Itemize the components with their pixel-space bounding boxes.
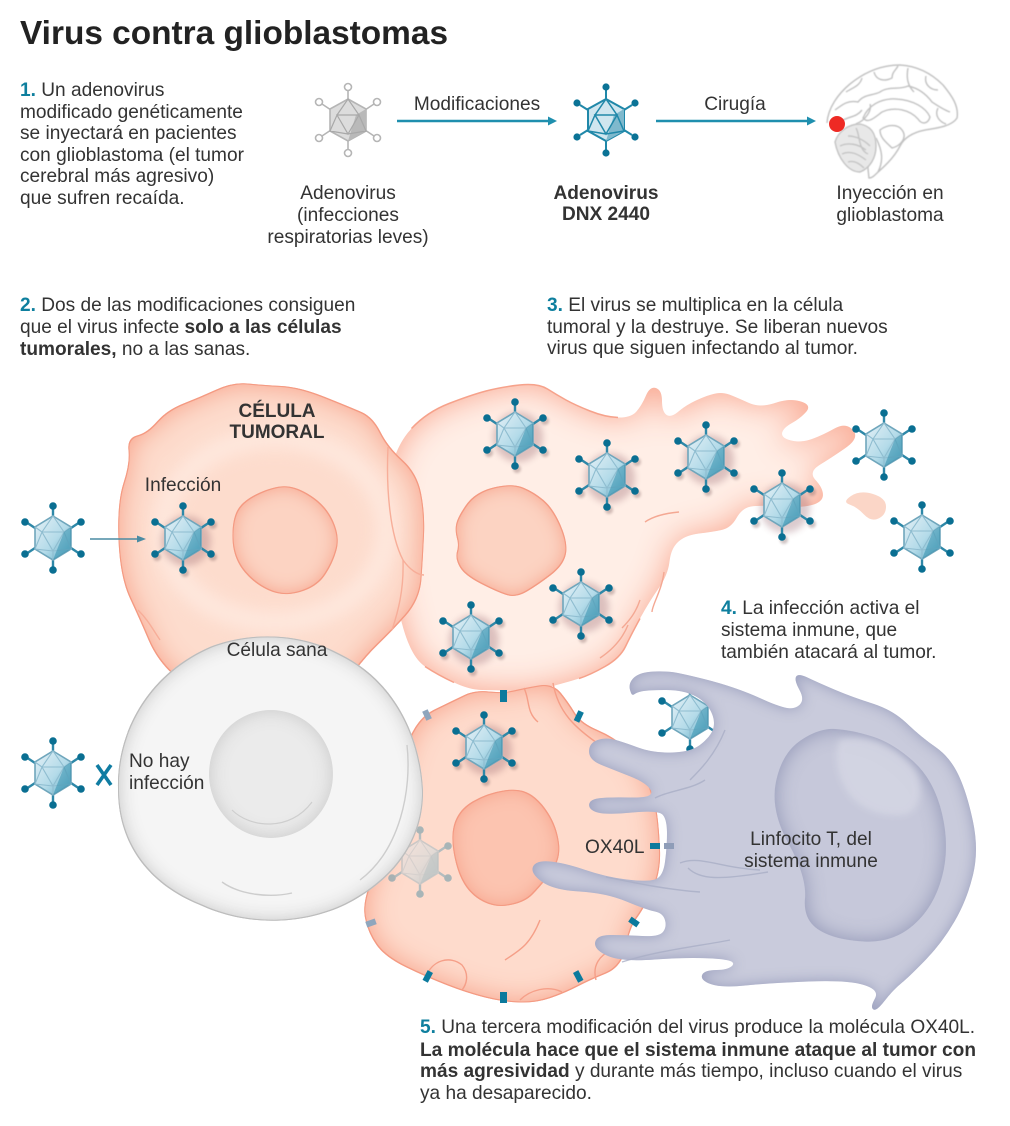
fragment <box>846 492 886 520</box>
text block: step 4: sistema inmune, que <box>721 620 897 641</box>
virus group: multiplied in tumour cell <box>439 398 954 676</box>
text block: step 4: también atacará al tumor. <box>721 642 936 663</box>
label: célula tumoral: TUMORAL <box>230 422 325 443</box>
text block: step 4: 4. La infección activa el <box>721 598 920 619</box>
label: no hay infección: No hay <box>129 751 190 772</box>
virus: outside tumour <box>21 502 85 574</box>
icon: adenovirus (grey) <box>316 84 380 156</box>
label: OX40L: OX40L <box>585 837 644 858</box>
label: adenovirus: respiratorias leves) <box>267 227 429 248</box>
text block: step 1: cerebral más agresivo) <box>20 166 214 187</box>
nucleus <box>209 710 333 838</box>
virus: blocked <box>21 737 85 809</box>
text block: step 3: tumoral y la destruye. Se liberan nuevos <box>547 317 888 338</box>
label: célula sana: Célula sana <box>227 640 328 661</box>
panel: destroyed tumour cell with viruses <box>388 384 886 691</box>
label: injection in glioblastoma: Inyección en <box>836 183 944 204</box>
panel: healthy cell <box>118 636 423 921</box>
text block: step 2: 2. Dos de las modificaciones consiguen <box>20 295 355 316</box>
label: modificaciones: Modificaciones <box>414 94 540 115</box>
label: adenovirus: (infecciones <box>297 205 399 226</box>
text block: step 5: más agresividad y durante más tiempo, incluso cuando el virus <box>420 1061 962 1082</box>
label: linfocito T: sistema inmune <box>744 851 878 872</box>
virus: in bottom tumour cell <box>452 711 518 786</box>
panel: T lymphocyte <box>532 671 976 1010</box>
arrow: entry into tumour cell <box>90 536 146 542</box>
label: adenovirus DNX 2440: DNX 2440 <box>562 204 650 225</box>
text block: step 3: 3. El virus se multiplica en la célula <box>547 295 843 316</box>
label: adenovirus DNX 2440: Adenovirus <box>553 183 659 204</box>
icon: adenovirus DNX 2440 <box>573 83 639 157</box>
text block: step 4 <box>721 598 936 663</box>
text block: step 1: que sufren recaída. <box>20 188 185 209</box>
text block: step 2: tumorales, no a las sanas. <box>20 339 250 360</box>
icon: brain with tumour <box>827 65 957 178</box>
text block: step 3: virus que siguen infectando al tumor. <box>547 338 858 359</box>
label: injection in glioblastoma <box>836 183 944 226</box>
text block: step 5: La molécula hace que el sistema inmune ataque al tumor con <box>420 1040 976 1061</box>
text block: step 1: modificado genéticamente <box>20 102 243 123</box>
label: adenovirus <box>267 183 429 248</box>
label: linfocito T: Linfocito T, del <box>750 829 872 850</box>
molecule: OX40L <box>650 843 674 849</box>
text block: step 5: ya ha desaparecido. <box>420 1083 592 1104</box>
tumour dot <box>829 116 845 132</box>
cerebellum <box>835 124 876 172</box>
label: no hay infección <box>129 751 204 794</box>
arrow: cirugía <box>656 116 816 126</box>
nucleus of bottom cell <box>452 790 559 906</box>
virus: fading behind healthy cell <box>388 826 452 898</box>
icon: X <box>97 765 111 785</box>
label: infección: Infección <box>145 475 221 496</box>
title: Virus contra glioblastomas <box>20 15 448 52</box>
nucleus lobe highlight <box>836 738 920 815</box>
nucleus crease <box>232 802 312 824</box>
text block: step 2 <box>20 295 355 360</box>
label: no hay infección: infección <box>129 773 204 794</box>
panel: tumour cell bottom <box>364 683 660 1003</box>
label: célula tumoral <box>230 400 325 443</box>
OX40L markers on tumour <box>365 690 640 1003</box>
label: linfocito T <box>744 829 878 872</box>
virus: captured by T cell <box>658 681 722 753</box>
label: injection in glioblastoma: glioblastoma <box>836 205 944 226</box>
text block: step 5 <box>420 1017 976 1104</box>
label: célula tumoral: CÉLULA <box>238 400 316 422</box>
text block: step 3 <box>547 295 888 359</box>
label: cirugía: Cirugía <box>704 94 766 115</box>
arrow: modificaciones <box>397 116 557 126</box>
virus: infecting tumour cell <box>151 502 217 577</box>
T cell nucleus <box>775 729 946 942</box>
panel: tumour cell (infection) <box>118 383 424 690</box>
T cell folds <box>606 730 768 962</box>
text block: step 5: 5. Una tercera modificación del virus produce la molécula OX40L. <box>420 1017 975 1038</box>
label: adenovirus: Adenovirus <box>300 183 396 204</box>
text block: step 1 <box>20 80 245 209</box>
text block: step 1: se inyectará en pacientes <box>20 123 237 144</box>
text block: step 1: con glioblastoma (el tumor <box>20 145 245 166</box>
text block: step 2: que el virus infecte solo a las células <box>20 317 342 338</box>
nucleus <box>232 486 338 594</box>
label: adenovirus DNX 2440 <box>553 183 659 225</box>
nucleus of destroyed cell <box>456 485 566 596</box>
text block: step 1: 1. Un adenovirus <box>20 80 164 101</box>
